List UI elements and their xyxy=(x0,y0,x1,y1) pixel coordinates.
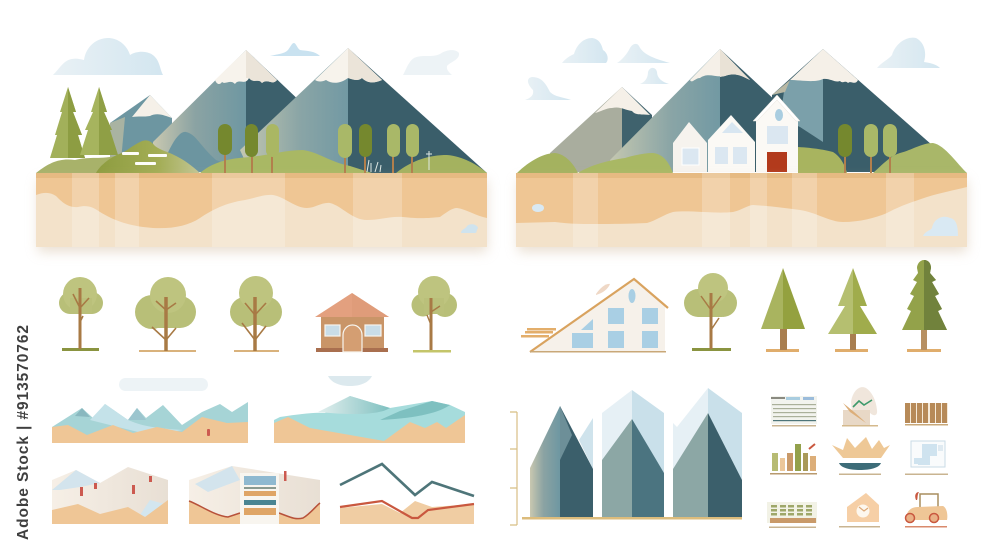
chart: teal and red line over tan xyxy=(340,464,474,524)
panel: mountain landscape right with houses xyxy=(516,38,967,252)
icon: floor plan xyxy=(905,441,948,475)
mountain A xyxy=(153,50,305,172)
decorative pill cloud xyxy=(119,378,208,391)
column 3 xyxy=(673,388,742,517)
pine icon 3 xyxy=(902,260,947,352)
chart: teal ridge with tan strata xyxy=(52,402,248,443)
axis xyxy=(510,412,517,525)
icon: striped bars xyxy=(905,403,948,426)
poplar trees right panel xyxy=(838,124,897,173)
icon: crown and bowl xyxy=(832,437,890,475)
green hills xyxy=(36,140,487,173)
icon: house clock xyxy=(839,493,880,528)
A-frame house icon xyxy=(521,279,668,352)
poplar trees xyxy=(218,124,419,173)
tree icon 2 xyxy=(135,277,196,352)
mid mountain right panel xyxy=(610,49,778,172)
house icon xyxy=(315,293,389,352)
back mountain xyxy=(110,95,172,172)
side credit label: Adobe Stock | #913570762 xyxy=(15,325,32,540)
half disc cloud xyxy=(328,376,372,386)
chart: mountain columns xyxy=(510,388,742,525)
clouds right panel xyxy=(525,38,940,100)
house group xyxy=(673,95,800,172)
ground strata xyxy=(36,173,487,252)
tree icon 3 xyxy=(230,276,282,352)
hill markers xyxy=(122,152,167,165)
chart: teal water layers xyxy=(274,396,465,443)
right mountain right panel xyxy=(772,49,932,172)
tree icon 1 xyxy=(59,277,103,351)
pine icon 2 xyxy=(828,268,877,352)
baseline xyxy=(522,517,742,520)
back mountain right panel xyxy=(550,87,652,172)
mountain B xyxy=(240,48,487,173)
column 2 xyxy=(602,390,664,517)
column 1 xyxy=(530,406,593,517)
grass and cross marker xyxy=(367,151,432,172)
ground strata right xyxy=(516,173,967,252)
tree icon 6 xyxy=(684,273,737,351)
panel: mountain landscape left xyxy=(36,38,487,252)
icon: data table xyxy=(771,396,817,426)
icon: bar chart xyxy=(770,444,817,474)
tree icon 5 xyxy=(412,276,457,352)
pine icon 1 xyxy=(761,268,805,352)
icon: grid table xyxy=(767,502,817,528)
clouds left panel xyxy=(53,38,459,75)
pine trees xyxy=(50,87,118,158)
icon: truck xyxy=(905,492,947,528)
green hills right panel xyxy=(517,143,967,173)
chart: cream ridge with markers xyxy=(52,467,168,524)
chart: building between ridges xyxy=(189,466,320,524)
icon: trend card xyxy=(842,387,878,426)
